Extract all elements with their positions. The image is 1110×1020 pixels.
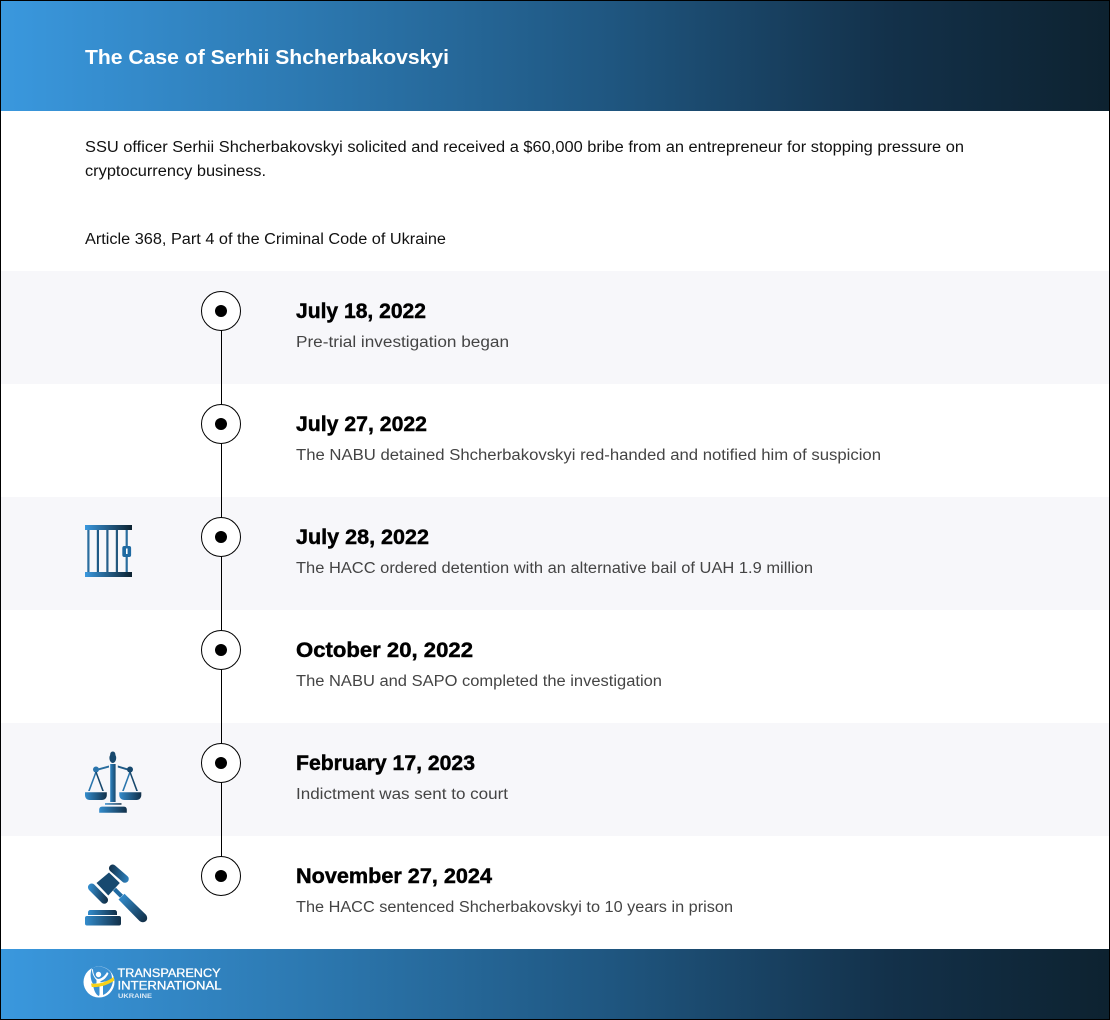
logo: Transparency International Ukraine — [84, 966, 222, 1000]
event 2: The NABU detained Shcherbakovskyi red-handed and notified him of suspicion — [296, 447, 881, 464]
event 2 — [296, 413, 881, 464]
case summary: cryptocurrency business. — [85, 163, 266, 180]
case summary: SSU officer Serhii Shcherbakovskyi solicited and received a $60,000 bribe from an entrepreneur for stopping pressure on — [85, 139, 964, 156]
event 4: October 20, 2022 — [296, 639, 473, 662]
logo wordmark: TRANSPARENCY — [118, 966, 221, 980]
event 6 — [296, 865, 733, 916]
event 6: November 27, 2024 — [296, 865, 492, 888]
timeline node 4 — [202, 630, 240, 670]
event 1: July 18, 2022 — [296, 300, 426, 323]
event 1 — [296, 300, 509, 351]
footer banner — [1, 949, 1109, 1019]
event 3: The HACC ordered detention with an alternative bail of UAH 1.9 million — [296, 560, 813, 577]
case summary — [85, 139, 964, 180]
logo: Transparency International Ukraine: UKRAINE — [118, 994, 152, 1000]
timeline node 2 — [202, 404, 240, 444]
event 6: The HACC sentenced Shcherbakovskyi to 10 years in prison — [296, 899, 733, 916]
event 5: Indictment was sent to court — [296, 786, 509, 803]
timeline connector — [220, 311, 222, 876]
event 5: February 17, 2023 — [296, 752, 475, 775]
event 3 — [296, 526, 813, 577]
event 4: The NABU and SAPO completed the investigation — [296, 673, 662, 690]
event 1: Pre-trial investigation began — [296, 334, 509, 351]
event 4 — [296, 639, 662, 690]
legal article: Article 368, Part 4 of the Criminal Code of Ukraine — [85, 231, 446, 248]
header banner — [1, 1, 1109, 111]
timeline node 5 — [202, 744, 240, 782]
title: The Case of Serhii Shcherbakovskyi — [85, 46, 449, 69]
icon: scales of justice — [85, 752, 141, 813]
logo: Transparency International Ukraine: INTERNATIONAL — [118, 978, 222, 992]
row backgrounds — [1, 271, 1109, 836]
event 3: July 28, 2022 — [296, 526, 429, 549]
logo emblem — [84, 966, 114, 998]
icon: prison bars — [85, 525, 132, 577]
event 2: July 27, 2022 — [296, 413, 427, 436]
timeline node 1 — [202, 292, 240, 330]
timeline node 6 — [202, 856, 240, 896]
icon: gavel — [85, 868, 147, 926]
timeline node 3 — [202, 518, 240, 556]
event 5 — [296, 752, 509, 803]
